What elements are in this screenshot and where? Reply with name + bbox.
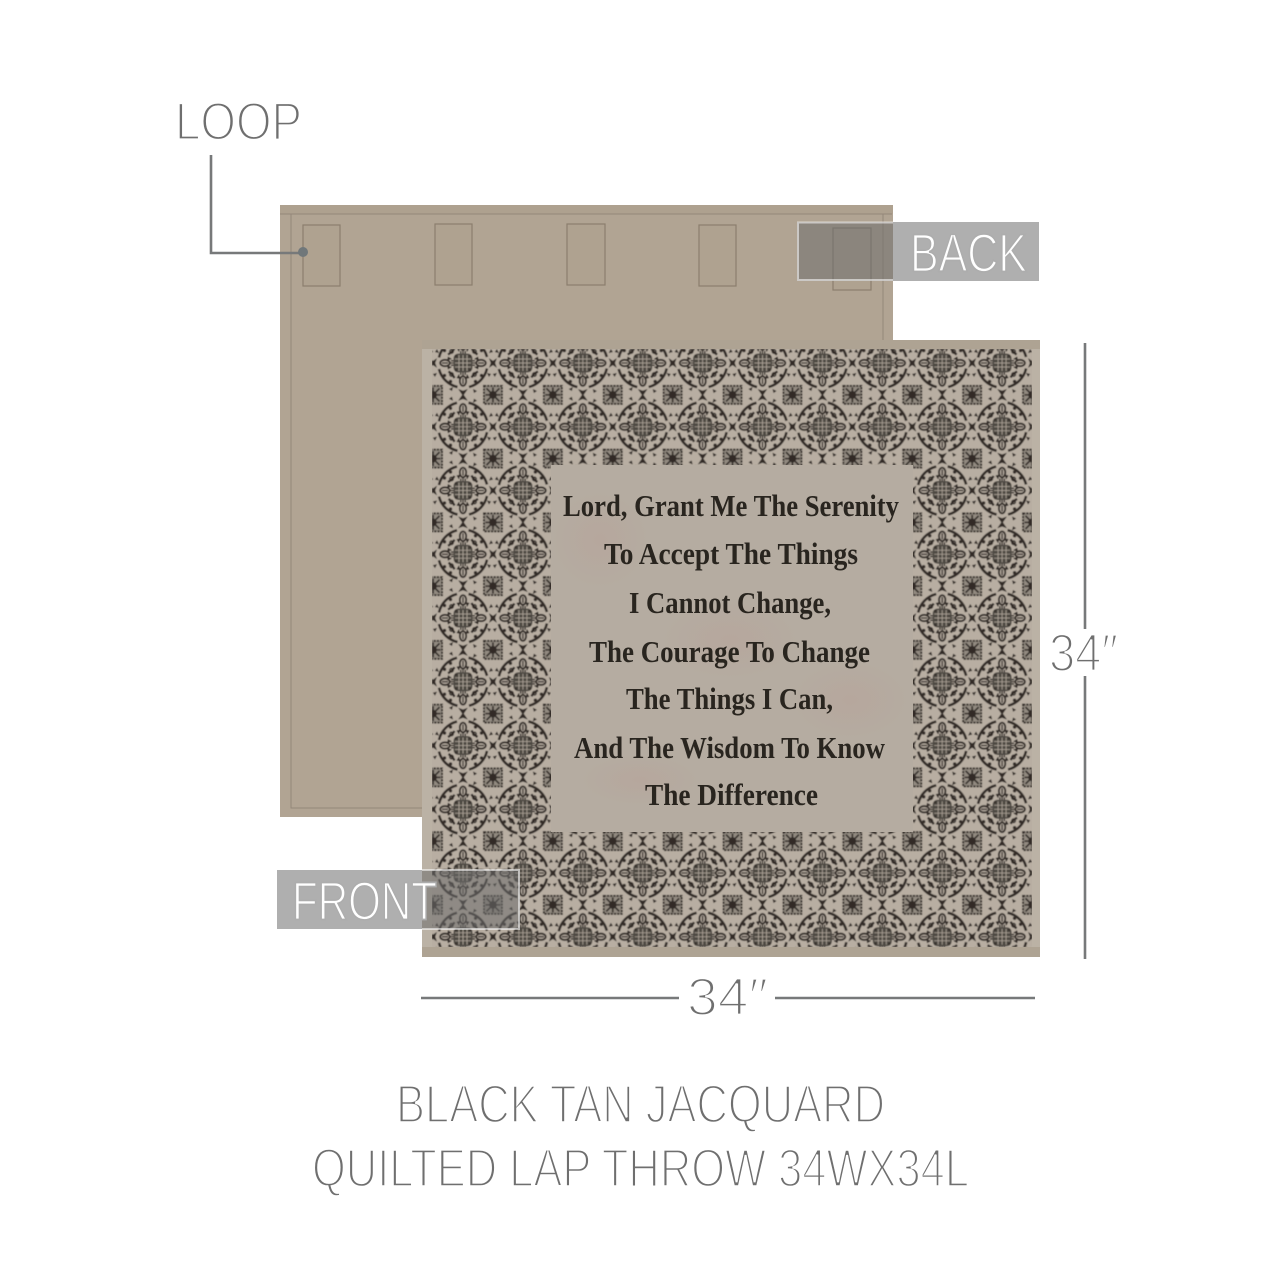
- verse line 1: Lord, Grant Me The Serenity: [563, 488, 899, 523]
- front label: FRONT: [292, 872, 437, 932]
- product title: BLACK TAN JACQUARD: [396, 1074, 885, 1134]
- back label: BACK: [910, 224, 1027, 284]
- verse line 3: I Cannot Change,: [629, 585, 831, 620]
- center verse block: [550, 465, 913, 832]
- loop 3: [567, 224, 605, 285]
- product title: [312, 1074, 969, 1198]
- verse line 5: The Things I Can,: [626, 681, 833, 716]
- loop 5: [833, 228, 871, 290]
- loop 2: [435, 224, 472, 285]
- back of throw panel: [280, 205, 893, 817]
- loop leader line: [211, 155, 308, 257]
- height dimension: 34″: [1049, 624, 1118, 683]
- verse line 4: The Courage To Change: [589, 634, 870, 669]
- verse line 7: The Difference: [645, 777, 818, 812]
- back label: [797, 222, 1039, 284]
- loop 1: [303, 225, 340, 286]
- width dimension: 34″: [687, 968, 768, 1027]
- product title: QUILTED LAP THROW 34WX34L: [312, 1138, 969, 1198]
- loop label: LOOP: [175, 92, 302, 152]
- verse line 2: To Accept The Things: [604, 536, 858, 571]
- front of throw panel: [422, 340, 1040, 957]
- loop 4: [699, 225, 736, 286]
- verse line 6: And The Wisdom To Know: [574, 730, 886, 765]
